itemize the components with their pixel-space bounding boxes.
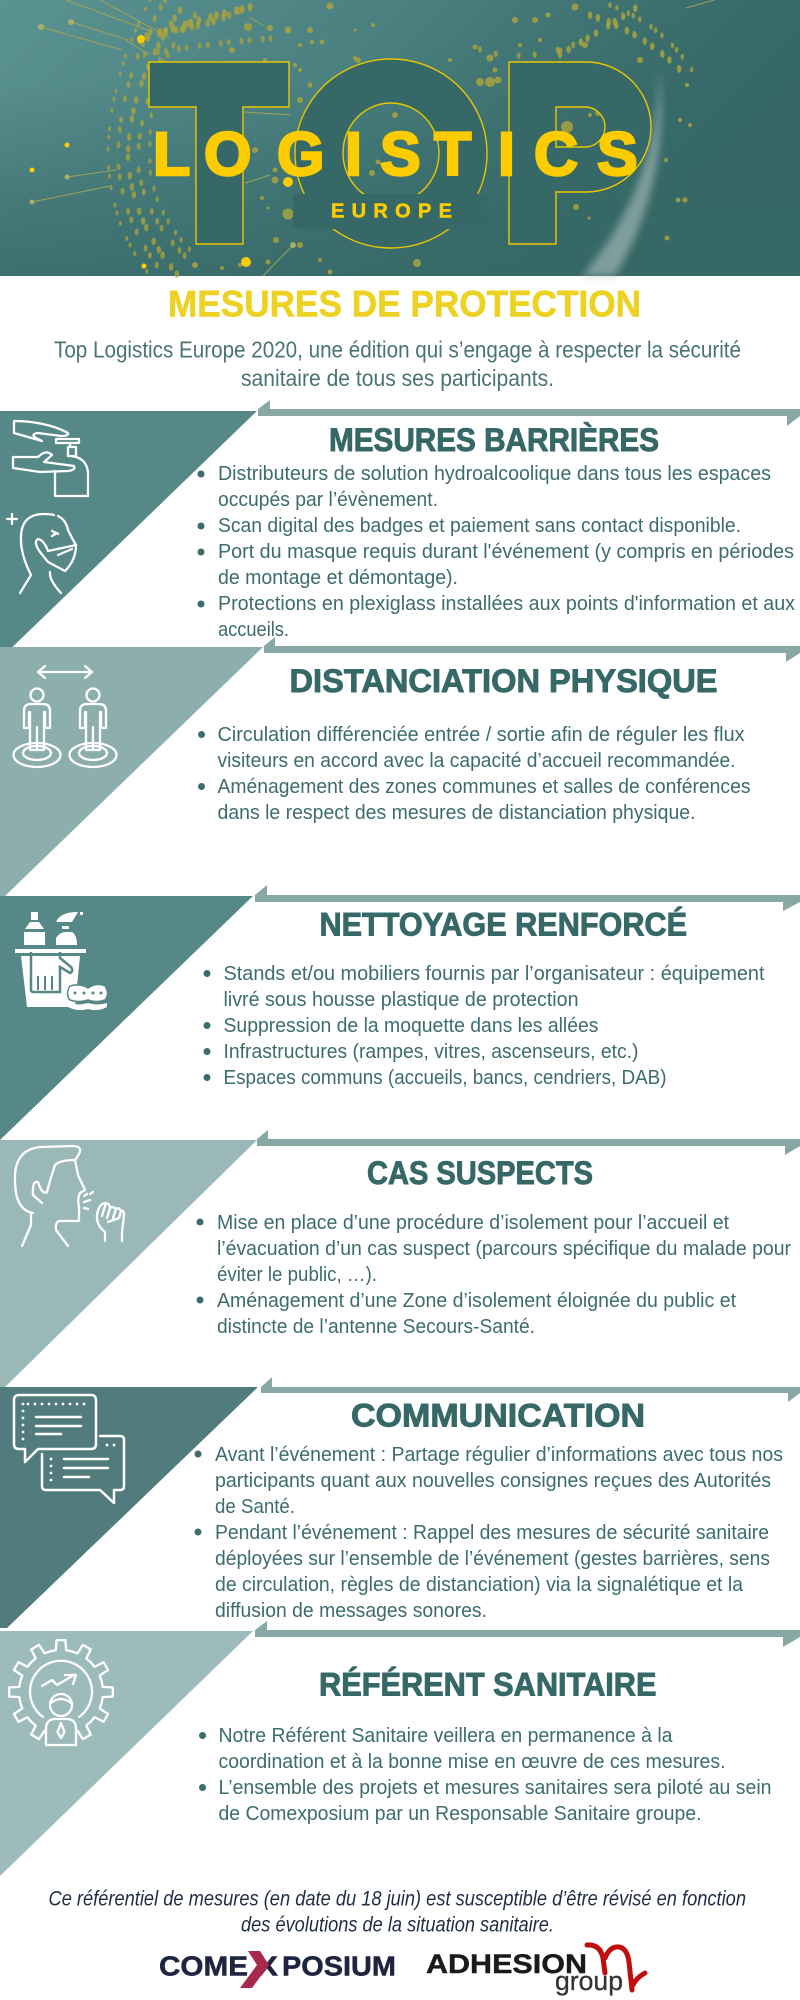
title: MESURES DE PROTECTION	[168, 284, 641, 324]
bullet list	[194, 1444, 783, 1622]
bullet list: coordination et à la bonne mise en œuvre de ces mesures.	[218, 1751, 726, 1773]
bullet list: accueils.	[218, 619, 289, 641]
bullet list: Stands et/ou mobiliers fournis par l’organisateur : équipement	[224, 963, 765, 985]
panel: cas suspects	[0, 1130, 800, 1387]
bullet list	[198, 724, 750, 824]
logo: Comexposium: X	[256, 1950, 278, 1982]
triangle background	[0, 1387, 258, 1628]
ribbon	[264, 637, 800, 662]
bullet list: participants quant aux nouvelles consignes reçues des Autorités	[215, 1470, 771, 1492]
logo wordmark LOGISTICS: LOGISTICS	[153, 120, 638, 188]
logo: Adhesion group	[426, 1945, 645, 1996]
bullet list: occupés par l’évènement.	[218, 489, 438, 511]
intro text	[54, 336, 741, 391]
ribbon	[257, 1130, 800, 1155]
bullet list: Espaces communs (accueils, bancs, cendriers, DAB)	[224, 1067, 666, 1089]
ribbon	[255, 1621, 800, 1647]
icon: gear with manager	[9, 1640, 113, 1745]
icon: two people at a distance	[14, 666, 116, 767]
ribbon	[255, 885, 800, 911]
triangle background	[0, 1140, 257, 1387]
panel: communication	[0, 1377, 800, 1628]
bullet list: Protections en plexiglass installées aux points d'information et aux	[218, 593, 795, 615]
heading: RÉFÉRENT SANITAIRE	[319, 1666, 656, 1702]
footer note: des évolutions de la situation sanitaire.	[241, 1914, 554, 1936]
bullet list: Port du masque requis durant l'événement (y compris en périodes	[218, 541, 794, 563]
bullet list: Circulation différenciée entrée / sortie afin de réguler les flux	[218, 724, 744, 746]
bullet list: Mise en place d’une procédure d’isolement pour l’accueil et	[217, 1212, 729, 1234]
triangle background	[0, 1631, 253, 1876]
icon: person with mask	[7, 514, 76, 593]
bullet list	[204, 963, 765, 1089]
bullet list: L’ensemble des projets et mesures sanitaires sera piloté au sein	[218, 1777, 772, 1799]
bullet list	[199, 1725, 772, 1825]
logo plate EUROPE: EUROPE	[331, 200, 452, 222]
heading: COMMUNICATION	[351, 1398, 645, 1434]
logo: Adhesion group: ADHESION	[426, 1949, 587, 1979]
triangle background	[0, 647, 263, 896]
icon: hand sanitizer	[13, 421, 88, 496]
triangle background	[0, 896, 253, 1140]
triangle background	[0, 411, 257, 659]
bullet list: dans le respect des mesures de distanciation physique.	[218, 802, 696, 824]
bullet list	[198, 463, 795, 641]
bullet list: Scan digital des badges et paiement sans contact disponible.	[218, 515, 741, 537]
bullet list: l’évacuation d’un cas suspect (parcours spécifique du malade pour	[217, 1238, 791, 1260]
heading: DISTANCIATION PHYSIQUE	[290, 663, 718, 699]
heading: NETTOYAGE RENFORCÉ	[320, 906, 687, 942]
icon: cleaning bucket	[15, 912, 108, 1010]
bullet list: Infrastructures (rampes, vitres, ascenseurs, etc.)	[224, 1041, 638, 1063]
icon: coughing person	[15, 1146, 124, 1246]
panel: distanciation physique	[0, 637, 800, 896]
bullet list: livré sous housse plastique de protection	[224, 989, 578, 1011]
heading: MESURES BARRIÈRES	[329, 422, 659, 458]
bullet list: de Santé.	[215, 1496, 295, 1518]
logo: Comexposium	[159, 1950, 396, 1988]
big outlined TOP letters	[149, 59, 651, 248]
ribbon	[261, 1377, 800, 1402]
bullet list: Aménagement d’une Zone d’isolement éloignée du public et	[217, 1290, 736, 1312]
bullet list: de Comexposium par un Responsable Sanitaire groupe.	[218, 1803, 702, 1825]
intro text: sanitaire de tous ses participants.	[241, 365, 554, 391]
bullet list: diffusion de messages sonores.	[215, 1600, 487, 1622]
bullet list: de montage et démontage).	[218, 567, 458, 589]
bullet list: éviter le public, …).	[217, 1264, 377, 1286]
intro text: Top Logistics Europe 2020, une édition qui s’engage à respecter la sécurité	[54, 336, 741, 362]
bullet list: distincte de l’antenne Secours-Santé.	[217, 1316, 535, 1338]
bullet list: Avant l’événement : Partage régulier d’informations avec tous nos	[215, 1444, 783, 1466]
panel: référent sanitaire	[0, 1621, 800, 1876]
bullet list: Distributeurs de solution hydroalcoolique dans tous les espaces	[218, 463, 771, 485]
bullet list: de circulation, règles de distanciation) via la signalétique et la	[215, 1574, 744, 1596]
bullet list: visiteurs en accord avec la capacité d’accueil recommandée.	[218, 750, 736, 772]
footer note	[48, 1888, 746, 1936]
logo: Comexposium: POSIUM	[282, 1950, 396, 1982]
bullet list: Pendant l’événement : Rappel des mesures de sécurité sanitaire	[215, 1522, 769, 1544]
logo: Adhesion group: group	[555, 1966, 623, 1996]
panel: mesures barrières	[0, 400, 800, 659]
ribbon	[258, 400, 800, 426]
header banner	[0, 0, 800, 276]
panel: nettoyage renforcé	[0, 885, 800, 1140]
bullet list: Notre Référent Sanitaire veillera en permanence à la	[218, 1725, 673, 1747]
bullet list: Suppression de la moquette dans les allées	[224, 1015, 598, 1037]
logo: Comexposium: COME	[159, 1950, 248, 1982]
bullet list: Aménagement des zones communes et salles de conférences	[218, 776, 750, 798]
bullet list	[196, 1212, 791, 1338]
heading: CAS SUSPECTS	[367, 1155, 593, 1191]
icon: chat bubbles	[14, 1395, 124, 1503]
logo plate EUROPE	[293, 194, 487, 229]
bullet list: déployées sur l’ensemble de l’événement (gestes barrières, sens	[215, 1548, 770, 1570]
